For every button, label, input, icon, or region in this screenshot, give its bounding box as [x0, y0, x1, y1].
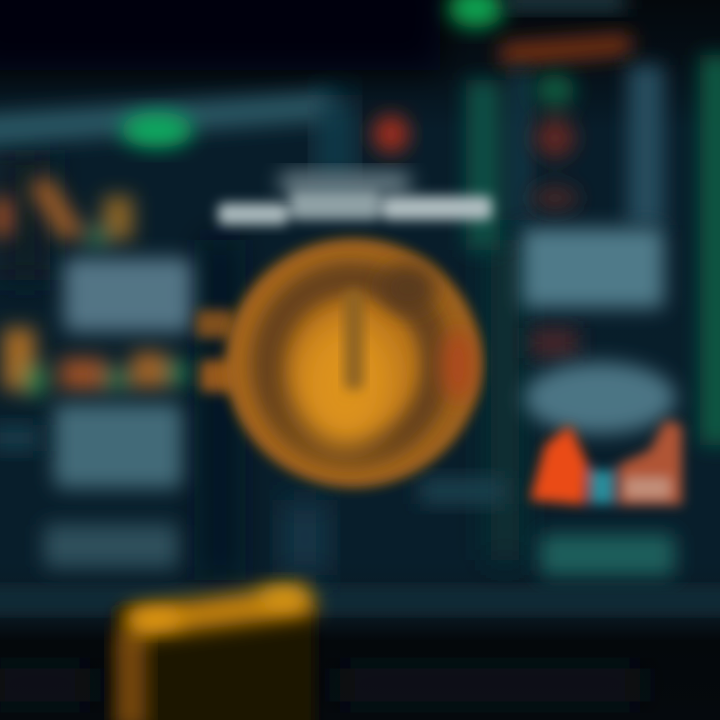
bar: orange header right	[500, 34, 632, 66]
title upper line	[280, 172, 410, 194]
chart: right coloured bars	[530, 420, 682, 505]
icon: green indicator left	[121, 112, 193, 148]
coin centre symbol	[344, 290, 364, 390]
panel: right card top	[522, 228, 664, 308]
coin outer ring	[240, 253, 464, 473]
chart: left candlesticks	[0, 176, 189, 395]
panel: top left dark band	[0, 0, 440, 70]
coin centre highlight	[297, 323, 393, 447]
icon: red indicator centre	[373, 115, 409, 153]
bar: top right grey	[505, 0, 625, 10]
coin red edge	[442, 329, 474, 401]
panel: left card middle	[54, 404, 182, 488]
bottom strip: keyboard glow	[0, 668, 640, 702]
title text block	[218, 172, 492, 225]
panel: left card bottom	[44, 524, 178, 568]
vertical strip: centre blue	[318, 95, 352, 185]
panel: right card bottom	[540, 534, 675, 576]
small panel: centre lower text	[420, 478, 505, 504]
icon: coin connector tabs	[196, 310, 238, 392]
panel: right card lower	[524, 362, 676, 434]
vertical strips: right side columns	[466, 55, 720, 445]
coin inner ring	[266, 277, 434, 453]
coin body	[227, 240, 481, 486]
panel: screen lower edge	[0, 590, 720, 610]
icon: coin	[227, 240, 481, 486]
panel: left card top	[64, 258, 192, 332]
bar: top left header strip	[0, 92, 335, 146]
coin dark upper right	[380, 264, 436, 312]
title main line	[218, 190, 492, 225]
bar: left mid strip	[0, 425, 40, 451]
cup: body	[115, 605, 315, 720]
cup: golden rim	[125, 585, 316, 638]
cup: left edge	[116, 630, 146, 720]
icon: green indicator top	[448, 0, 504, 28]
icon: red marker right	[530, 328, 578, 358]
chart: right column indicators	[531, 74, 579, 210]
panel: dark columns	[0, 150, 520, 580]
vertical strip: stem below coin	[283, 500, 327, 575]
cup: rim highlight	[127, 588, 306, 627]
